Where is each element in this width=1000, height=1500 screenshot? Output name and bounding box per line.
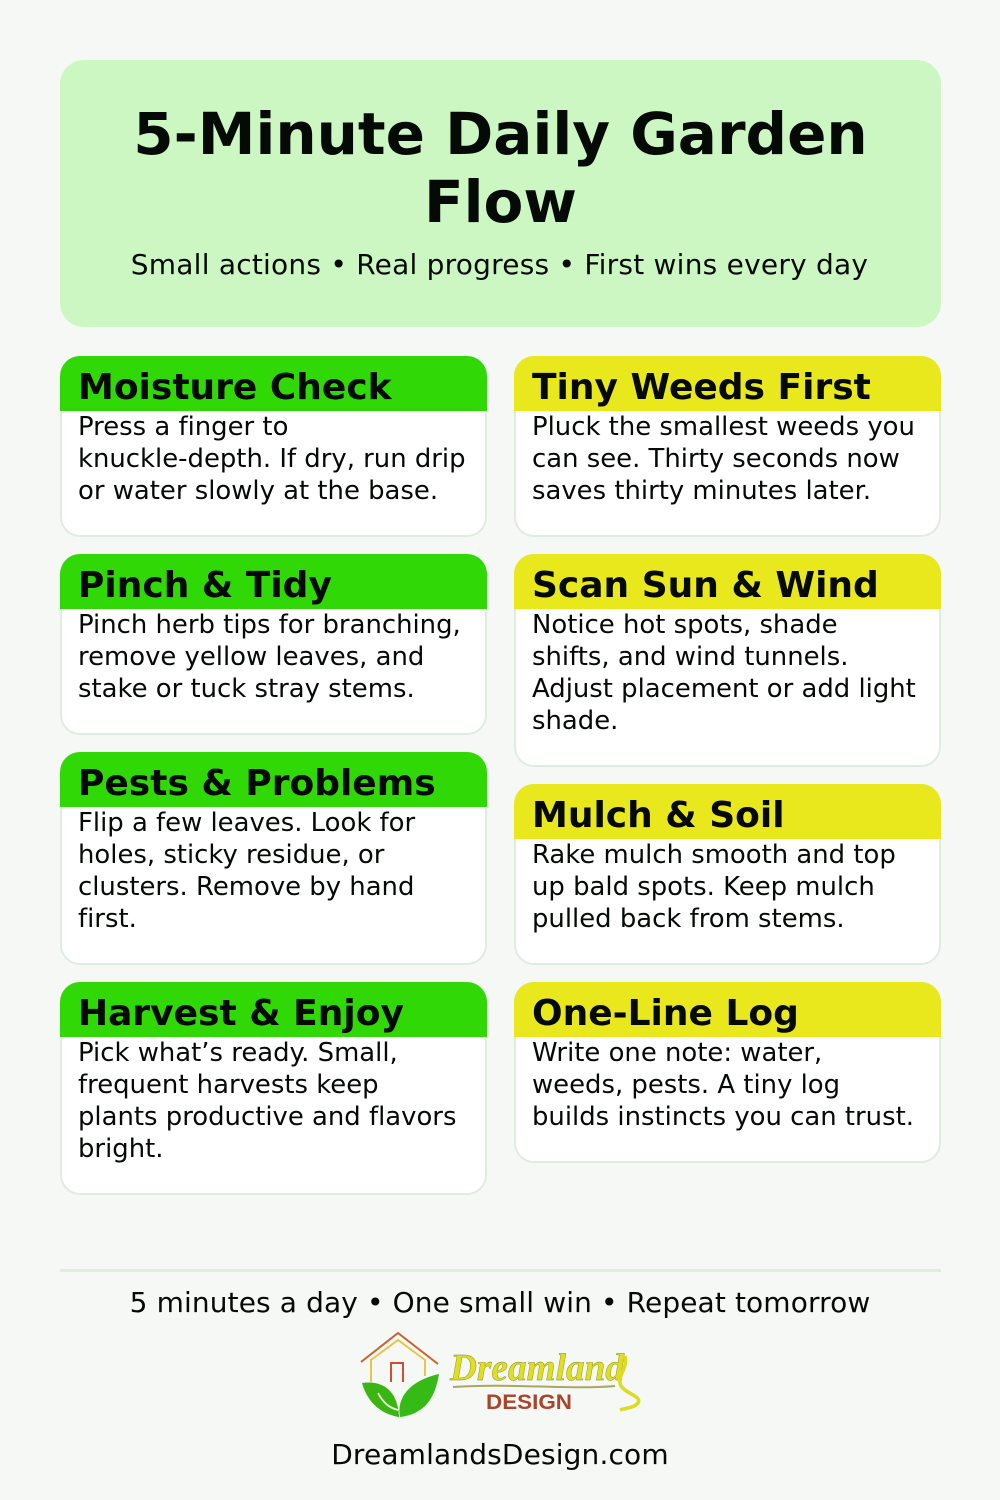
text: Scan Sun & Wind: Adjust placement or add light [532,674,916,704]
card: Mulch & Soil [514,784,941,965]
text: Mulch & Soil: Rake mulch smooth and top [532,840,896,870]
website: DreamlandsDesign.com [331,1438,669,1471]
text: Moisture Check [78,412,466,506]
text: Scan Sun & Wind [532,610,916,736]
heading: Scan Sun & Wind [514,554,941,609]
text: Pests & Problems [78,808,416,934]
text: Scan Sun & Wind: shade. [532,706,618,736]
logo: Dreamland Design [360,1332,640,1417]
text: Pests & Problems: holes, sticky residue, or [78,840,384,870]
logo wordmark: DESIGN [486,1391,572,1414]
text: Pests & Problems: first. [78,904,137,934]
title [133,100,868,236]
text: Tiny Weeds First: Pluck the smallest weeds you [532,412,915,442]
heading: Tiny Weeds First [514,356,941,411]
text: Harvest & Enjoy: Pick what’s ready. Small, [78,1038,398,1068]
text: Harvest & Enjoy [78,1038,456,1164]
text: Mulch & Soil [532,840,896,934]
title: Flow [424,168,577,236]
logo wordmark: Dreamland [449,1347,625,1389]
text: Harvest & Enjoy: frequent harvests keep [78,1070,379,1100]
text: One-Line Log: Write one note: water, [532,1038,822,1068]
subtitle: Small actions • Real progress • First wins every day [131,248,868,281]
heading: Moisture Check: Moisture Check [78,367,392,408]
text: Harvest & Enjoy: plants productive and flavors [78,1102,456,1132]
heading: One-Line Log [514,982,941,1037]
text: Pinch & Tidy: Pinch herb tips for branching, [78,610,461,640]
card: Moisture Check [60,356,487,537]
card: Scan Sun & Wind [514,554,941,767]
text: Pests & Problems: clusters. Remove by hand [78,872,414,902]
text: Pinch & Tidy: stake or tuck stray stems. [78,674,415,704]
card: Pinch & Tidy [60,554,487,735]
heading: Pinch & Tidy: Pinch & Tidy [78,565,332,606]
title: 5-Minute Daily Garden [133,100,868,168]
icon: house outline [361,1333,438,1382]
text: One-Line Log [532,1038,914,1132]
footer tagline: 5 minutes a day • One small win • Repeat tomorrow [130,1286,870,1319]
text: Mulch & Soil: pulled back from stems. [532,904,845,934]
text: Tiny Weeds First: can see. Thirty seconds now [532,444,900,474]
text: Pinch & Tidy: remove yellow leaves, and [78,642,424,672]
text: Harvest & Enjoy: bright. [78,1134,164,1164]
heading: Harvest & Enjoy: Harvest & Enjoy [78,993,404,1034]
heading: Mulch & Soil: Mulch & Soil [532,795,785,836]
heading: Tiny Weeds First: Tiny Weeds First [532,367,871,408]
icon: leaves [362,1374,439,1417]
text: Scan Sun & Wind: shifts, and wind tunnels. [532,642,848,672]
card: One-Line Log [514,982,941,1163]
text: Scan Sun & Wind: Notice hot spots, shade [532,610,838,640]
text: One-Line Log: builds instincts you can trust. [532,1102,914,1132]
heading: Scan Sun & Wind: Scan Sun & Wind [532,565,879,606]
logo wordmark [449,1347,639,1414]
card: Pests & Problems [60,752,487,965]
heading: Harvest & Enjoy [60,982,487,1037]
text: Pinch & Tidy [78,610,461,704]
text: Tiny Weeds First: saves thirty minutes later. [532,476,871,506]
text: One-Line Log: weeds, pests. A tiny log [532,1070,840,1100]
text: Moisture Check: or water slowly at the base. [78,476,438,506]
card: Harvest & Enjoy [60,982,487,1195]
card: Tiny Weeds First [514,356,941,537]
text: Tiny Weeds First [532,412,915,506]
text: Mulch & Soil: up bald spots. Keep mulch [532,872,875,902]
heading: Pinch & Tidy [60,554,487,609]
heading: One-Line Log: One-Line Log [532,993,799,1034]
text: Pests & Problems: Flip a few leaves. Look for [78,808,415,838]
text: Moisture Check: knuckle-depth. If dry, run drip [78,444,466,474]
heading: Pests & Problems [60,752,487,807]
text: Moisture Check: Press a finger to [78,412,288,442]
heading: Moisture Check [60,356,487,411]
heading: Mulch & Soil [514,784,941,839]
title banner [60,60,941,327]
heading: Pests & Problems: Pests & Problems [78,763,436,804]
